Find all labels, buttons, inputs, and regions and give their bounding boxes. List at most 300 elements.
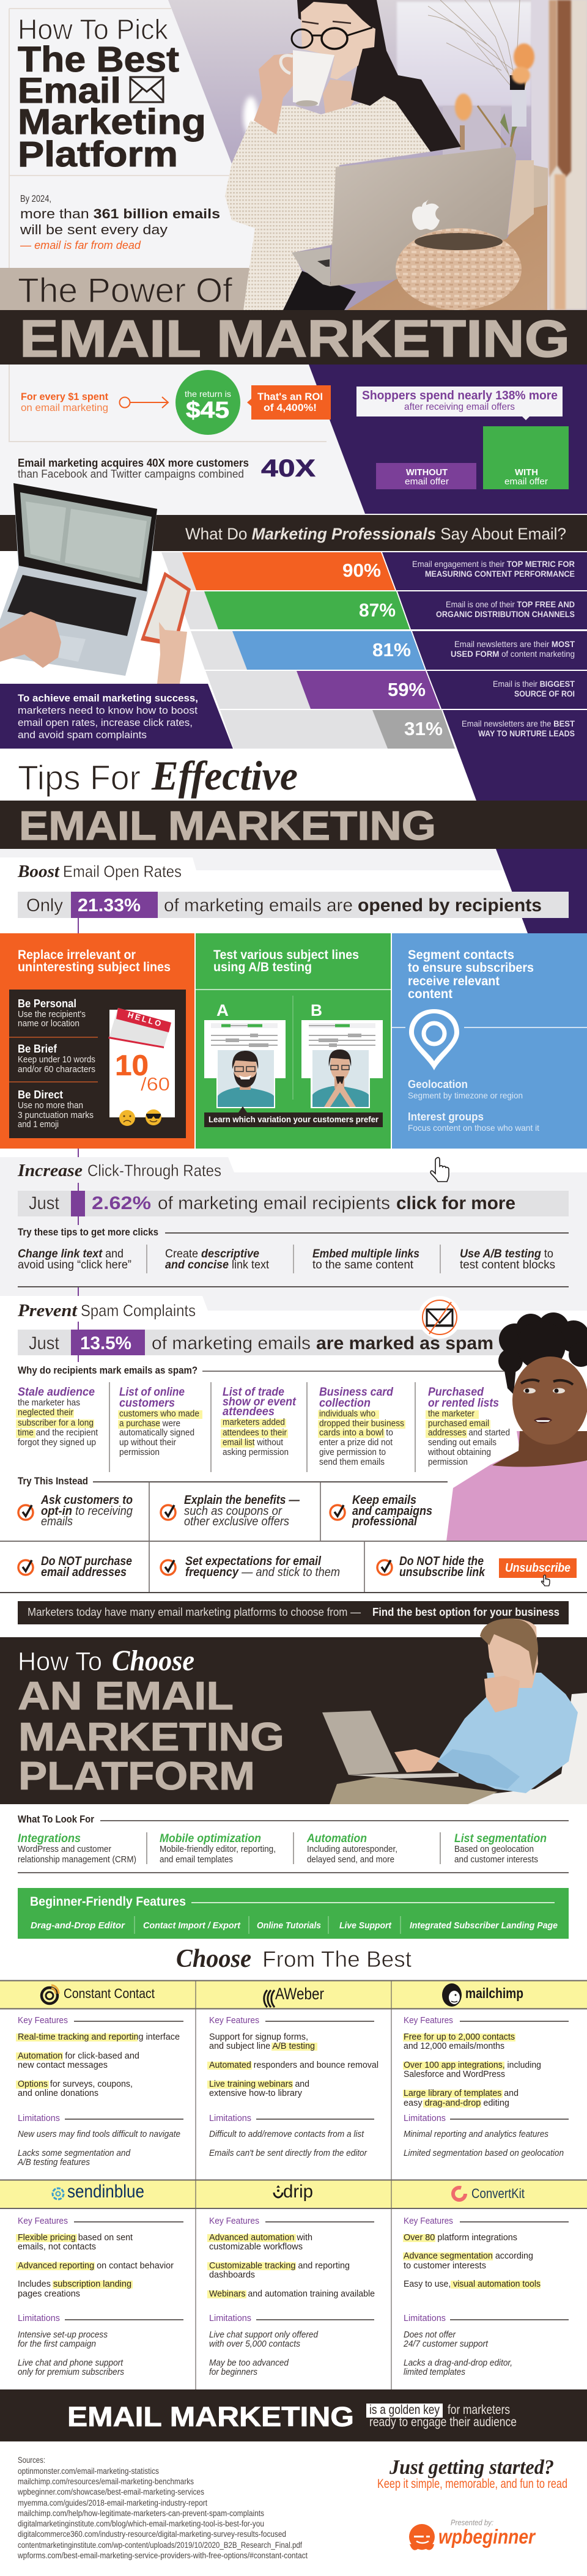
item: list segmentation: Based on geolocation: [454, 1844, 534, 1854]
card: constant contact: Limitations: [18, 2113, 60, 2123]
column: purchased or rented lists: addresses and started: [428, 1427, 510, 1438]
card: convertkit: Over 80 platform integrations: [404, 2232, 517, 2243]
item: automation: delayed send, and more: [307, 1854, 394, 1865]
column: stale audience: neglected their: [18, 1407, 73, 1418]
tip: explain the benefits: such as coupons or: [184, 1505, 282, 1518]
tips list: and concise link text: [165, 1259, 270, 1271]
panel: replace subject lines: name or location: [18, 1018, 79, 1029]
panel: replace subject lines: Use no more than: [18, 1100, 83, 1111]
section heading: the power of email marketing: EMAIL MARKETING: [20, 310, 570, 368]
tip: ask customers to opt-in: [18, 1493, 133, 1528]
roi text: For every $1 spent: [21, 391, 108, 402]
bar: without email offer: [376, 463, 476, 489]
tip: keep emails professional: [330, 1493, 432, 1528]
column: list of trade show attendees: attendees to their: [223, 1427, 287, 1438]
40x statistic: 40X: [261, 455, 316, 482]
column: stale audience: the marketer has: [18, 1397, 80, 1408]
item: list segmentation: and customer interests: [454, 1854, 538, 1865]
card: convertkit: Key Features: [404, 2216, 453, 2226]
tip: set expectations: frequency — and stick to them: [185, 1566, 340, 1579]
tip: keep emails professional: and campaigns: [352, 1505, 432, 1518]
card: sendinblue: Limitations: [18, 2313, 60, 2323]
heading: [17, 1301, 196, 1320]
card: sendinblue: Live chat and phone support: [18, 2358, 124, 2368]
tips list: avoid using “click here”: [18, 1259, 131, 1271]
call to action: just getting started: Just getting started?: [389, 2456, 554, 2479]
column: purchased or rented lists: or rented lists: [428, 1397, 499, 1410]
hero photo: woman with mug and laptop: [225, 0, 587, 310]
bar chart: 81%: [372, 639, 411, 661]
card: constant contact: Options for surveys, coupons,: [18, 2079, 133, 2089]
photo: laptop and phone: [0, 483, 191, 684]
panel: replace subject lines: Replace irrelevant or: [18, 948, 136, 962]
item: automation: Automation: [306, 1832, 367, 1845]
card: aweber: Emails can't be sent directly from the editor: [209, 2148, 367, 2158]
card: drip: May be too advanced: [209, 2358, 289, 2368]
card: subject line length: HELLO: [127, 1010, 164, 1029]
tip: do not purchase: Do NOT purchase: [41, 1555, 132, 1568]
panel: beginner-friendly features: [18, 1888, 569, 1939]
panel: replace subject lines: 3 punctuation marks: [18, 1110, 94, 1120]
column: purchased or rented lists: purchased email: [428, 1418, 489, 1429]
bar chart: ORGANIC DISTRIBUTION CHANNELS: [436, 609, 575, 619]
tips heading: Try these tips to get more clicks: [18, 1226, 158, 1238]
panel: segment contacts: Focus content on those who want it: [408, 1123, 539, 1133]
card: convertkit: Advance segmentation according: [404, 2251, 533, 2261]
laptop: [292, 147, 516, 286]
card: convertkit: [403, 2186, 569, 2377]
panel: a/b testing: [196, 933, 391, 1149]
bar chart: Email is one of their TOP FREE AND: [446, 599, 575, 609]
card: constant contact: Automation for click-based and: [18, 2051, 139, 2061]
item: automation: Including autoresponder,: [307, 1844, 397, 1854]
panel: beginner-friendly features: Online Tutorials: [257, 1920, 321, 1931]
banner: email marketing is a golden key: [0, 2389, 587, 2441]
panel: segment contacts: receive relevant: [408, 974, 500, 988]
panel: a/b testing: Test various subject lines: [213, 948, 359, 962]
item: mobile optimization: [160, 1832, 276, 1865]
tip: do not hide unsubscribe: [377, 1555, 577, 1586]
roi callout: [247, 385, 331, 420]
column: stale audience: forgot they signed up: [18, 1437, 96, 1448]
tip: do not purchase: email addresses: [41, 1566, 127, 1579]
tips list: test content blocks: [460, 1259, 555, 1271]
card: subject line length: [108, 1008, 175, 1126]
tooltip: learn which variation: Learn which variation your customers prefer: [209, 1114, 379, 1124]
why heading: Why do recipients mark emails as spam?: [18, 1364, 198, 1376]
heading: Click-Through Rates: [87, 1161, 221, 1180]
section heading: tips for effective email marketing: EMAIL MARKETING: [19, 803, 436, 849]
card: sendinblue: only for premium subscribers: [18, 2367, 124, 2377]
sources list: mailchimp.com/help/how-legitimate-marketers-can-prevent-spam-complaints: [18, 2509, 264, 2518]
card: aweber: and subject line A/B testing: [209, 2041, 315, 2051]
tips list: to the same content: [312, 1259, 414, 1271]
card: sendinblue: emails, not contacts: [18, 2241, 96, 2252]
card: aweber: Key Features: [209, 2015, 259, 2026]
sources list: contentmarketinginstitute.com/wp-content/uploads/2019/10/2020_B2B_Research_Final.pdf: [18, 2541, 302, 2550]
banner: email marketing is a golden key: EMAIL MARKETING: [67, 2401, 354, 2432]
panel: replace subject lines: uninteresting subject lines: [18, 960, 171, 974]
item: list segmentation: List segmentation: [454, 1832, 547, 1845]
sources list: wpforms.com/best-email-marketing-service-providers-with-free-options/#constant-contact: [17, 2551, 308, 2560]
icon: hand cursor: [430, 1158, 449, 1182]
card: mailchimp: Key Features: [404, 2015, 453, 2026]
tip: do not purchase: [18, 1555, 132, 1579]
logo: drip: drip: [283, 2182, 313, 2202]
section heading: tips for effective email marketing: [0, 752, 587, 849]
roi text: [21, 391, 108, 413]
email variation b: [301, 1020, 383, 1108]
card: constant contact: new contact messages: [18, 2060, 108, 2070]
intro statistic: will be sent every day: [20, 222, 168, 237]
stat bar: click for more: [396, 1193, 515, 1213]
tip: do not hide unsubscribe: unsubscribe link: [399, 1566, 485, 1579]
column: list of online customers: customers: [119, 1397, 175, 1410]
icon: envelope: [130, 77, 163, 102]
column: business card collection: cards into a bowl to: [319, 1427, 393, 1438]
card: drip: for beginners: [209, 2367, 257, 2377]
banner: email marketing is a golden key: ready to engage their audience: [369, 2415, 517, 2429]
panel: beginner-friendly features: Contact Import / Export: [143, 1920, 241, 1931]
title: Platform: [18, 135, 178, 174]
column: business card collection: enter a prize did not: [319, 1437, 393, 1448]
card: sendinblue: for the first campaign: [18, 2339, 96, 2349]
tip: set expectations: Set expectations for email: [185, 1555, 321, 1568]
stat bar: of marketing emails are: [164, 895, 353, 916]
left text panel: [0, 0, 272, 268]
sources list: digitalmarketinginstitute.com/blog/which-email-marketing-tool-is-best-for-you: [18, 2519, 264, 2528]
card: drip: dashboards: [209, 2270, 255, 2280]
tips list: Use A/B testing to: [460, 1248, 553, 1260]
icon: sunglasses emoji: [146, 1109, 161, 1125]
woman: [225, 0, 461, 310]
column: business card collection: Business card: [319, 1386, 393, 1399]
panel: replace subject lines: and 1 emoji: [18, 1119, 59, 1130]
icon: location pin: [409, 1009, 459, 1070]
card: drip: Live chat support only offered: [209, 2330, 319, 2340]
panel: segment contacts: Segment by timezone or region: [408, 1090, 523, 1100]
column: purchased or rented lists: without obtaining: [427, 1447, 491, 1457]
card: constant contact: [16, 1985, 183, 2167]
tip: set expectations: [161, 1555, 340, 1579]
logo: mailchimp: mailchimp: [465, 1985, 523, 2001]
title: How To Pick: [18, 13, 169, 45]
stat bar: [18, 892, 569, 933]
return circle: $45: [186, 398, 229, 423]
stat bar: of marketing email recipients: [158, 1193, 390, 1213]
card: aweber: extensive how-to library: [209, 2088, 302, 2098]
panel: beginner-friendly features: Drag-and-Drop Editor: [31, 1920, 125, 1931]
card: drip: Webinars and automation training available: [209, 2289, 375, 2299]
card: drip: [207, 2182, 375, 2377]
logo: wpbeginner: wpbeginner: [438, 2525, 536, 2548]
card: drip: Limitations: [209, 2313, 251, 2323]
column: list of trade show attendees: show or event: [223, 1396, 297, 1408]
panel: what to look for: What To Look For: [18, 1813, 94, 1825]
panel: beginner-friendly features: Live Support: [339, 1920, 392, 1931]
card: constant contact: A/B testing features: [17, 2157, 90, 2167]
section heading: tips for effective email marketing: Effective: [151, 752, 298, 799]
card: aweber: Difficult to add/remove contacts from a list: [209, 2129, 364, 2139]
logo: sendinblue: sendinblue: [67, 2182, 144, 2202]
icon: sad emoji: [119, 1110, 135, 1126]
card: constant contact: Key Features: [18, 2015, 68, 2026]
bar chart: Email newsletters are the BEST: [462, 719, 575, 728]
card: sendinblue: Flexible pricing based on sent: [18, 2232, 133, 2243]
panel: segment contacts: Segment contacts: [408, 948, 514, 962]
stat bar: Just: [29, 1193, 60, 1213]
panel: replace subject lines: Be Direct: [18, 1089, 63, 1101]
column: business card collection: dropped their business: [319, 1418, 404, 1429]
bar chart: 31%: [404, 718, 443, 739]
panel: replace subject lines: and/or 60 characters: [18, 1064, 95, 1075]
card: subject line length: 10: [115, 1049, 149, 1081]
bar chart: WAY TO NURTURE LEADS: [478, 728, 575, 738]
column: stale audience: [16, 1386, 98, 1448]
intro statistic: more than 361 billion emails: [20, 206, 220, 221]
column: list of online customers: List of online: [119, 1386, 185, 1399]
card: mailchimp: Large library of templates and: [404, 2088, 519, 2098]
card: aweber: [207, 1985, 378, 2158]
stat bar: 2.62%: [92, 1193, 151, 1213]
heading: MARKETING: [18, 1714, 284, 1759]
logo: convertkit: [453, 2186, 525, 2201]
card: sendinblue: Intensive set-up process: [18, 2330, 108, 2340]
card: convertkit: Lacks a drag-and-drop editor,: [404, 2358, 512, 2368]
card: mailchimp: Limitations: [404, 2113, 446, 2123]
heading: choose from the best: Choose: [176, 1945, 251, 1973]
column: purchased or rented lists: the marketer: [428, 1408, 474, 1419]
card: mailchimp: Minimal reporting and analytics features: [404, 2129, 548, 2139]
banner: email marketing is a golden key: for marketers: [448, 2403, 510, 2417]
panel: segment contacts: Interest groups: [408, 1111, 484, 1123]
logo: constant contact: Constant Contact: [64, 1986, 155, 2001]
column: list of trade show attendees: [221, 1386, 297, 1457]
callout: email marketing success: and avoid spam complaints: [18, 729, 147, 741]
section heading: tips for effective email marketing: Tips For: [18, 758, 141, 798]
panel: segment contacts: [392, 933, 587, 1149]
logo: constant contact: [42, 1985, 155, 2004]
card: sendinblue: Includes subscription landing: [18, 2279, 131, 2289]
card: subject line length: /60: [141, 1073, 170, 1095]
item: integrations: WordPress and customer: [18, 1844, 111, 1854]
tips list: Embed multiple links: [312, 1248, 419, 1260]
call to action: just getting started: [377, 2456, 567, 2491]
heading: [17, 1161, 221, 1180]
bar: with email offer: email offer: [504, 476, 548, 487]
card: drip: Customizable tracking and reporting: [209, 2260, 350, 2271]
bar chart: Email is their BIGGEST: [493, 679, 575, 689]
card: drip: with over 5,000 contacts: [209, 2339, 300, 2349]
card: mailchimp: Free for up to 2,000 contacts: [404, 2032, 515, 2042]
panel: what marketing professionals say: [0, 483, 587, 801]
column: purchased or rented lists: permission: [428, 1457, 468, 1467]
section: boost email open rates: [0, 849, 587, 1149]
heading: Increase: [17, 1161, 83, 1180]
card: sendinblue: Advanced reporting on contact behavior: [18, 2260, 174, 2271]
card: constant contact: and online donations: [18, 2088, 98, 2098]
banner: find the best option: [18, 1601, 569, 1624]
heading: [18, 1645, 284, 1798]
heading: [17, 862, 182, 881]
hero section: [0, 0, 587, 310]
card: aweber: Limitations: [209, 2113, 251, 2123]
tip: ask customers to opt-in: emails: [41, 1515, 73, 1528]
wicker basket: [396, 228, 522, 310]
bar chart: MEASURING CONTENT PERFORMANCE: [425, 569, 575, 579]
column: stale audience: Stale audience: [18, 1386, 95, 1399]
bar chart: SOURCE OF ROI: [514, 689, 575, 698]
heading: choose from the best: From The Best: [262, 1947, 412, 1972]
bar chart: [161, 552, 587, 801]
stat bar: 21.33%: [78, 895, 141, 916]
intro statistic: [20, 194, 220, 251]
callout: email marketing success: To achieve email marketing success,: [18, 692, 198, 704]
title: The Best: [18, 40, 179, 80]
card: mailchimp: Salesforce and WordPress: [404, 2069, 505, 2079]
card: mailchimp: easy drag-and-drop editing: [404, 2098, 509, 2108]
section heading: the power of email marketing: The Power Of: [18, 271, 232, 310]
panel: what to look for: [18, 1813, 569, 1873]
intro statistic: — email is far from dead: [20, 239, 141, 251]
column: list of online customers: a purchase were: [119, 1418, 180, 1429]
intro statistic: By 2024,: [20, 194, 51, 204]
item: integrations: Integrations: [18, 1832, 81, 1845]
card: aweber: Support for signup forms,: [209, 2032, 308, 2042]
email variation a: [204, 1020, 286, 1108]
banner: find the best option: Find the best option for your business: [372, 1606, 559, 1618]
sources list: mailchimp.com/resources/email-marketing-benchmarks: [18, 2477, 194, 2486]
heading: Choose: [112, 1645, 194, 1677]
column: stale audience: time and the recipient: [18, 1427, 98, 1438]
stat bar: [18, 1330, 519, 1355]
tips list: Create descriptive: [165, 1248, 259, 1260]
logo: aweber: [264, 1985, 324, 2007]
logo: wpbeginner: Presented by:: [451, 2518, 493, 2527]
panel: beginner-friendly features: Beginner-Friendly Features: [30, 1895, 186, 1909]
column: purchased or rented lists: [426, 1386, 510, 1467]
sources list: optinmonster.com/email-marketing-statistics: [18, 2467, 159, 2476]
bar: with email offer: [483, 426, 569, 489]
heading: Boost: [17, 862, 60, 881]
column: purchased or rented lists: sending out emails: [428, 1437, 497, 1448]
unsubscribe button: [499, 1558, 577, 1586]
column: business card collection: collection: [319, 1397, 371, 1410]
callout: email marketing success: marketers need to know how to boost: [18, 705, 198, 716]
stat bar: Just: [29, 1333, 60, 1353]
card: drip: customizable workflows: [209, 2241, 303, 2252]
bar: without email offer: email offer: [405, 476, 449, 487]
column: list of online customers: up without their: [119, 1437, 176, 1448]
tooltip: learn which variation: [204, 1106, 383, 1127]
return circle: [175, 370, 240, 435]
section heading: the power of email marketing: [0, 271, 587, 368]
unsubscribe button: Unsubscribe: [505, 1561, 570, 1575]
item: integrations: [18, 1832, 136, 1865]
item: list segmentation: [454, 1832, 547, 1865]
section: increase click-through rates: [0, 1149, 587, 1311]
card: drip: Advanced automation with: [209, 2232, 312, 2243]
card: convertkit: Does not offer: [404, 2330, 456, 2340]
item: mobile optimization: Mobile optimization: [160, 1832, 261, 1845]
column: list of trade show attendees: List of trade: [223, 1386, 284, 1399]
panel: beginner-friendly features: Integrated Subscriber Landing Page: [410, 1920, 558, 1931]
card: sendinblue: [16, 2182, 183, 2377]
sources list: Sources:: [18, 2456, 45, 2465]
stat bar: of marketing emails: [152, 1333, 311, 1353]
card: mailchimp: Limited segmentation based on geolocation: [404, 2148, 564, 2158]
column: business card collection: send them emails: [319, 1457, 385, 1467]
panel: replace subject lines: Keep under 10 words: [18, 1054, 95, 1065]
shoppers callout: after receiving email offers: [404, 402, 515, 412]
item: automation: [306, 1832, 397, 1865]
icon: no mail: [418, 1296, 461, 1339]
panel: email roi and shoppers: [0, 365, 587, 515]
tip: keep emails professional: Keep emails: [352, 1493, 416, 1507]
stat bar: are marked as spam: [316, 1333, 493, 1353]
tip: explain the benefits: [161, 1493, 300, 1528]
card: convertkit: to customer interests: [404, 2260, 486, 2271]
bar: without email offer: WITHOUT: [406, 467, 448, 478]
heading: What Do Marketing Professionals Say About Email?: [185, 525, 566, 543]
bar chart: 90%: [342, 560, 381, 581]
column: purchased or rented lists: Purchased: [428, 1386, 484, 1399]
title: Marketing: [18, 102, 206, 142]
panel: a/b testing: using A/B testing: [213, 960, 312, 974]
tip: explain the benefits: Explain the benefits —: [184, 1493, 300, 1507]
logo: wpbeginner: [409, 2518, 536, 2550]
card: mailchimp: [403, 1983, 569, 2158]
card: sendinblue: Key Features: [18, 2216, 68, 2226]
column: business card collection: individuals who: [319, 1408, 375, 1419]
title: [18, 13, 206, 174]
card: convertkit: limited templates: [404, 2367, 465, 2377]
heading: Email Open Rates: [63, 862, 182, 881]
section: how to choose an email marketing platform: [0, 1619, 587, 1804]
item: mobile optimization: Mobile-friendly editor, reporting,: [160, 1844, 276, 1854]
panel: segment contacts: content: [408, 987, 452, 1001]
roi text: on email marketing: [21, 402, 108, 413]
heading: Prevent: [17, 1301, 78, 1320]
roi callout: That's an ROI: [257, 391, 323, 402]
tip: ask customers to opt-in: Ask customers to: [40, 1493, 133, 1507]
column: list of trade show attendees: marketers added: [223, 1417, 285, 1427]
column: list of trade show attendees: asking permission: [223, 1447, 289, 1457]
sources list: [17, 2456, 308, 2560]
shoppers callout: [356, 387, 563, 420]
40x statistic: [18, 455, 316, 482]
logo: mailchimp: [442, 1983, 523, 2007]
card: mailchimp: Over 100 app integrations, including: [404, 2060, 541, 2070]
callout: email marketing success: [0, 684, 233, 749]
tip: ask customers to opt-in: opt-in to receiving: [41, 1505, 133, 1518]
column: list of trade show attendees: attendees: [223, 1405, 275, 1418]
tip: explain the benefits: other exclusive offers: [184, 1515, 289, 1528]
arrow: [120, 397, 168, 408]
column: list of trade show attendees: email list without: [223, 1437, 284, 1448]
card: mailchimp: and 12,000 emails/months: [404, 2041, 504, 2051]
section: prevent spam complaints: [0, 1296, 587, 1624]
sources list: myemma.com/guides/2018-email-marketing-industry-report: [18, 2498, 207, 2508]
stat bar: opened by recipients: [358, 895, 542, 916]
card: sendinblue: pages creations: [18, 2289, 80, 2299]
card: convertkit: Limitations: [404, 2313, 446, 2323]
card: constant contact: Lacks some segmentation and: [18, 2148, 131, 2158]
try this instead heading: Try This Instead: [18, 1475, 88, 1487]
card: constant contact: New users may find tools difficult to navigate: [18, 2129, 180, 2139]
card: constant contact: Real-time tracking and reporting interface: [18, 2032, 180, 2042]
column: list of online customers: customers who made: [119, 1408, 199, 1419]
